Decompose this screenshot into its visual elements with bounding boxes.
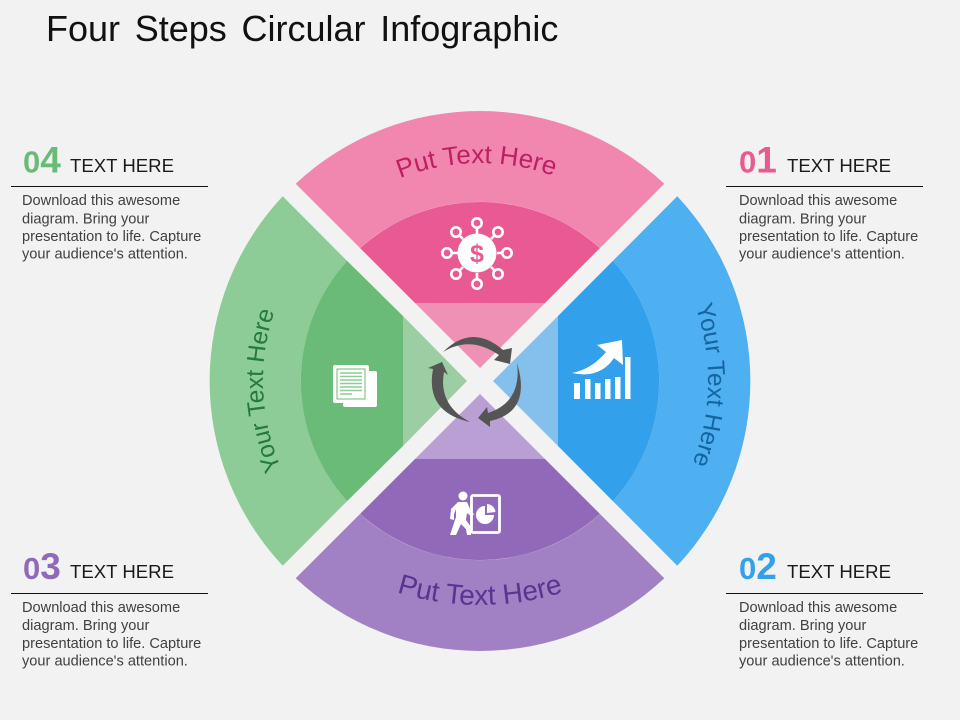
panel: blue right segment — [493, 196, 750, 566]
callout: step 02: diagram. Bring your — [739, 618, 866, 634]
icon: documents — [333, 365, 377, 407]
icon: dollar network — [442, 218, 512, 289]
callout: step 04: diagram. Bring your — [22, 212, 149, 228]
callout: step 01: 01 — [739, 140, 777, 180]
icon: cycle arrows — [428, 337, 521, 427]
callout: step 02 — [726, 546, 923, 670]
callout: step 02: your audience's attention. — [739, 654, 905, 670]
title: Four Steps Circular Infographic — [46, 8, 558, 49]
callout: step 01: Download this awesome — [739, 193, 897, 209]
callout: step 01 — [726, 140, 923, 262]
callout: step 04: your audience's attention. — [22, 246, 188, 262]
panel: purple bottom segment — [296, 394, 664, 651]
callout: step 01: presentation to life. Capture — [739, 229, 918, 245]
panel: pink top segment — [296, 111, 664, 368]
callout: step 02: TEXT HERE — [787, 561, 891, 582]
callout: step 03: TEXT HERE — [70, 561, 174, 582]
callout: step 01: your audience's attention. — [739, 246, 905, 262]
callout: step 03 — [11, 546, 208, 670]
callout: step 04: Download this awesome — [22, 193, 180, 209]
callout: step 04 — [11, 140, 208, 262]
callout: step 01: TEXT HERE — [787, 155, 891, 176]
panel: green left segment — [210, 196, 467, 566]
icon: dollar network: $ — [470, 240, 484, 268]
callout: step 02: presentation to life. Capture — [739, 636, 918, 652]
callout: step 01: diagram. Bring your — [739, 212, 866, 228]
callout: step 04: presentation to life. Capture — [22, 229, 201, 245]
callout: step 02: Download this awesome — [739, 600, 897, 616]
callout: step 02: 02 — [739, 546, 777, 587]
icon: person presenting tablet — [450, 492, 500, 535]
curved label: green: Your Text Here — [247, 310, 279, 474]
icon: rising bar chart — [572, 340, 630, 399]
curved label: purple: Put Text Here — [398, 574, 561, 605]
curved label: blue: Your Text Here — [694, 302, 725, 466]
callout: step 03: presentation to life. Capture — [22, 636, 201, 652]
callout: step 03: your audience's attention. — [22, 654, 188, 670]
callout: step 03: diagram. Bring your — [22, 618, 149, 634]
callout: step 03: 03 — [23, 546, 61, 587]
callout: step 03: Download this awesome — [22, 600, 180, 616]
callout: step 04: 04 — [23, 140, 61, 180]
curved label: pink: Put Text Here — [396, 146, 556, 178]
callout: step 04: TEXT HERE — [70, 155, 174, 176]
